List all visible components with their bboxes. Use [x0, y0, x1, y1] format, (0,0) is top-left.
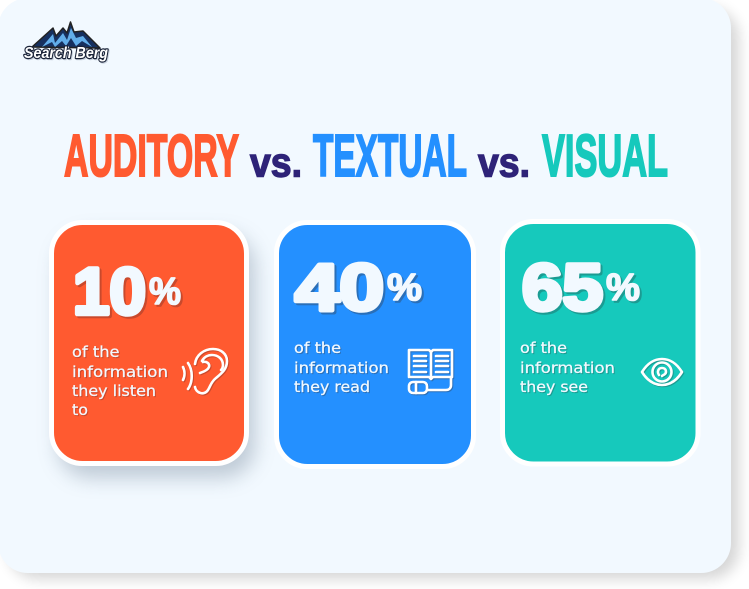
icon: eye — [642, 359, 682, 385]
title word: auditory: AUDITORY — [64, 123, 239, 189]
text: textual description: they read — [294, 378, 370, 396]
stat: 65 percent: 65 — [522, 250, 603, 324]
title word: vs second: vs. — [478, 140, 530, 186]
stat: 65 percent: % — [606, 267, 640, 309]
text: visual description: information — [520, 359, 615, 377]
text: visual description — [520, 339, 615, 396]
stat: 40 percent: 40 — [295, 250, 384, 324]
stat: 10 percent: % — [149, 271, 181, 313]
panel: visual card — [502, 222, 698, 464]
stat: 40 percent: % — [387, 267, 422, 309]
title word: vs: vs. — [250, 140, 302, 186]
icon: mountains — [32, 22, 100, 48]
text: textual description: of the — [294, 339, 341, 357]
text: visual description: they see — [520, 378, 588, 396]
logo text: Search Berg — [24, 45, 108, 62]
icon: book and mouse — [409, 350, 452, 393]
title word: textual: TEXTUAL — [313, 123, 467, 189]
logo: Search Berg — [24, 22, 108, 62]
text: textual description — [294, 339, 389, 396]
stat: 10 percent — [73, 254, 181, 328]
text: visual description: of the — [520, 339, 567, 357]
icon: ear — [183, 349, 227, 393]
text: textual description: information — [294, 359, 389, 377]
text: auditory description — [72, 343, 168, 419]
text: auditory description: of the — [72, 343, 120, 361]
text: auditory description: to — [72, 401, 88, 419]
stat: 10 percent: 10 — [73, 254, 146, 328]
panel: textual card — [276, 222, 474, 466]
text: auditory description: they listen — [72, 382, 156, 400]
stat: 40 percent — [295, 250, 422, 324]
text: auditory description: information — [72, 363, 168, 381]
title — [64, 123, 668, 189]
stat: 65 percent — [522, 250, 640, 324]
panel: auditory card — [52, 222, 255, 478]
